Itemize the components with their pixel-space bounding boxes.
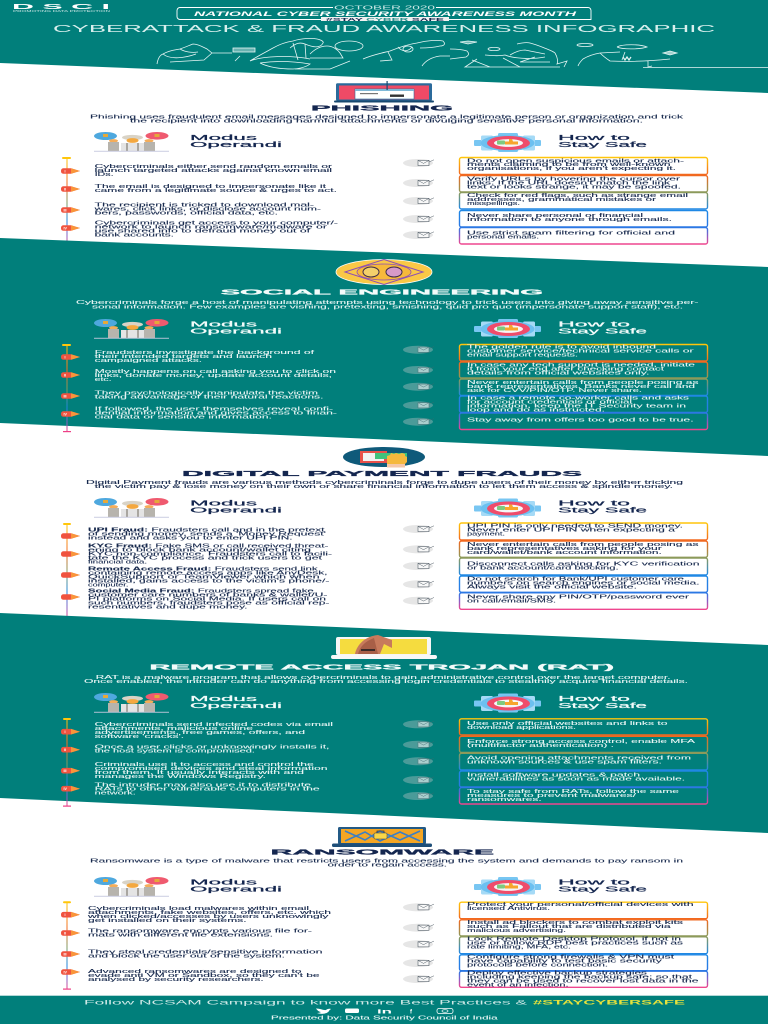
modus operandi steps: Once a user clicks or unknowingly installs it, [95,744,330,750]
timeline: IV [64,787,67,791]
how to stay safe label [558,499,647,515]
hashtag banner: #STAY CYBER SAFE [326,17,446,23]
modus operandi steps: installed, gains access to the victim's phone/- [88,578,330,584]
intro text [84,675,689,685]
safety tips: Use only official websites and links to [467,721,668,727]
safety tips: information, keep the IT Security team in [467,404,686,410]
modus operandi steps: Cybercriminals either send random emails or [95,164,332,170]
icon: stay safe gear [474,498,541,518]
safety tip boxes [460,719,708,804]
safety tips: such as Fallout that are distributed via [467,924,673,930]
safety tips: Verify URLs by hovering the cursor over [467,176,680,182]
safety tips: on call/email/SMS. [467,599,557,605]
intro text: Phishing uses fraudulent email messages designed to impersonate a legitimate person or organization and trick [90,114,683,120]
timeline: I [64,169,66,173]
modus operandi steps [88,527,332,611]
how to stay safe label: How to [558,499,630,508]
modus operandi steps: QuickSupport or TeamViewer which when [88,574,320,580]
safety tips: card/wallet/bank account information. [467,550,663,556]
section: digital payment frauds [61,447,708,619]
heading: SOCIAL ENGINEERING [221,288,543,297]
safety tips: ments claiming to be from well-known [467,162,671,168]
timeline [61,901,80,990]
modus operandi steps: The email is designed to impersonate like it [95,184,327,190]
section: social engineering [0,238,768,456]
modus operandi label [190,133,283,149]
timeline: IV [64,970,67,974]
modus operandi steps: ening to block bank account/wallet citing [88,548,311,554]
header banner [0,0,768,93]
modus operandi label: Modus [190,694,258,703]
modus operandi steps: IDs. [95,172,114,178]
timeline: IV [64,226,67,230]
intro text: Cybercriminals forge a host of manipulating attempts using technology to trick users into giving away sensitive per- [76,300,699,306]
safety tips: ransomwares. [467,797,543,803]
social icons: f [410,1010,413,1016]
modus operandi steps: network to launch ransomware/malware or [95,225,327,231]
modus operandi steps: Fraudsters investigate the background of [95,350,315,356]
intro text: Once enabled, the intruder can do anything from accessing login credentials to stealthily acquire financial details. [84,679,689,685]
modus operandi steps: cial data or sensitive information. [95,415,273,421]
presented by: Presented by: Data Security Council of India [271,1015,498,1021]
modus operandi steps: when clicked/accesses by users unknowingly [86,914,329,920]
safety tips: organisations, if you aren't expecting it. [467,166,677,172]
modus operandi steps: their intended targets and launch [95,354,272,360]
social icons [316,1008,453,1016]
safety tips [467,345,699,424]
timeline [61,157,80,246]
modus operandi steps: attachments, fake websites, offers, etc. which [88,910,331,916]
modus operandi steps: of sending money, sends a 'Money Request' [88,531,326,537]
safety tips: payment. [467,532,506,538]
safety tips: links. If the URL doesn't match the link [467,180,670,186]
icon: stay safe gear [474,877,541,896]
modus operandi steps: tate the KYC process and trick users to get [88,556,323,562]
timeline: II [64,187,66,191]
how to stay safe label: Stay Safe [558,327,647,336]
modus operandi steps: PI platforms on Social Media. If users call on [88,597,326,603]
modus operandi steps: etc. [95,377,112,383]
modus operandi steps: customer care numbers of banks & wallet/U- [88,593,328,599]
icon: stay safe gear [474,319,541,338]
safety tips: licensed Antivirus. [467,906,551,912]
modus operandi steps [92,164,338,239]
safety tips: text or looks strange, it may be spoofed. [467,184,682,190]
hashtag: #STAYCYBERSAFE [533,1000,687,1007]
modus operandi label [190,499,283,515]
safety tips: Lock Remote Desktop Protocol, if not in [467,937,681,943]
modus operandi steps: The ransomware encrypts various file for- [88,928,312,934]
safety tips: event of an infection. [467,982,569,988]
safety tips: download applications. [467,725,577,731]
section: remote access trojan [0,613,768,833]
how to stay safe label: Stay Safe [558,140,647,149]
hashtag banner [321,17,449,23]
modus operandi steps: Mostly happens on call asking you to click on [95,369,336,375]
safety tips [467,902,698,988]
safety tips: Never share any PIN/OTP/password ever [467,595,689,601]
timeline: III [64,208,66,212]
icon: modus operandi [94,319,169,339]
safety tip boxes [460,902,708,987]
safety tips: bank representatives asking for your [467,546,662,552]
modus operandi steps: resentatives and dupe money. [88,605,248,611]
timeline: IV [64,412,67,416]
intro text [90,114,683,124]
safety tips: Install ad blockers to combat exploit kits [467,920,683,926]
safety tips [467,524,700,605]
how to stay safe label: Stay Safe [558,506,647,515]
line art illustration of people [157,38,768,69]
section: ransomware [61,827,708,990]
intro text [76,300,699,310]
modus operandi steps: use shared info to defraud money out of [95,229,311,235]
modus operandi steps: The intruder may also use it to distribute [95,783,311,789]
safety tips: or bank account/card blocking. [467,565,619,571]
modus operandi steps: RATs to other vulnerable computers in the [95,787,320,793]
modus operandi steps: software 'cracks'. [95,734,185,740]
check icons [403,720,434,800]
safety tip boxes [460,158,708,244]
timeline [61,344,80,432]
intro text: Ransomware is a type of malware that restricts users from accessing the system and demands to pay ransom in [90,859,683,865]
safety tips: Never entertain calls from people posing as [467,542,699,548]
safety tips: Do not search for Bank/UPI customer care [467,577,684,583]
modus operandi steps [95,722,333,797]
campaign frame [177,5,591,20]
modus operandi steps: advertisements, free games, offers, and [95,730,305,736]
modus operandi label [190,320,283,336]
safety tips [467,158,688,240]
safety tips: The golden rule is to avoid inbound [467,345,656,351]
timeline: II [64,931,66,935]
safety tips: use or follow RDP best practices such as [467,941,683,947]
icon: phishing laptop [334,81,434,102]
icon: stay safe gear [474,694,541,712]
modus operandi steps: Advanced ransomwares are designed to [88,969,302,975]
modus operandi steps: Remote Access Fraud: Fraudsters send link [88,566,318,572]
modus operandi label: Modus [190,133,258,142]
modus operandi steps: Social Media Fraud: Fraudsters spread fake [88,589,314,595]
how to stay safe label [558,320,647,336]
modus operandi label: Modus [190,877,258,886]
modus operandi steps: mats with different file extensions. [88,932,274,938]
modus operandi steps: The recipient is tricked to download mal- [95,203,314,209]
safety tips: bank representatives. Banks never call and [467,384,695,390]
modus operandi steps: financial data. [88,560,148,566]
safety tips: personal emails. [467,234,540,240]
how to stay safe label [558,133,647,149]
modus operandi steps: came from a legitimate source & urges to act. [95,188,338,194]
modus operandi steps: attachments, malicious online [95,726,253,732]
safety tips: Install software updates & patch [467,773,640,779]
safety tips: In case a remote co-worker calls and asks [467,396,689,402]
modus operandi steps: get installed on their systems. [88,918,248,924]
timeline [61,718,80,807]
how to stay safe label [558,877,647,893]
safety tips: vulnerabilities as soon as made available. [467,777,686,783]
modus operandi steps: and block the user out of the system. [88,953,286,959]
how to stay safe label: Stay Safe [558,884,647,893]
modus operandi label: Operandi [190,701,283,710]
modus operandi steps: taking advantage of their natural reactions. [95,395,324,401]
main title: CYBERATTACK & FRAUD AWARENESS INFOGRAPHIC [53,24,715,35]
timeline: I [64,730,66,734]
modus operandi steps: wares, click links, or disclose account num- [92,207,321,213]
timeline: II [64,748,66,752]
safety tips: Avoid opening attachments received from [467,756,692,762]
modus operandi steps: such numbers, fraudsters pose as official rep- [88,601,330,607]
social icons: in [377,1010,393,1016]
how to stay safe label: How to [558,320,630,329]
modus operandi steps: They psychologically manipulate the victim [95,391,319,397]
safety tips: Stay away from offers too good to be true. [467,418,695,424]
follow line: Follow NCSAM Campaign to know more Best Practices & [84,1000,529,1007]
modus operandi steps: compromised devices and steal information [95,766,327,772]
modus operandi steps: evade anti VM or Sandbox, so they can't be [88,973,320,979]
safety tips: Check for red flags, such as strange email [467,193,688,199]
safety tips: information to anyone through emails. [467,217,673,223]
modus operandi label [190,694,283,710]
modus operandi steps: manages the Windows Registry. [95,774,267,780]
safety tips: malicious advertising. [467,928,567,934]
safety tips: misspellings. [467,201,521,207]
icon: trojan horse laptop [331,635,437,659]
safety tips: for account credentials or official [467,400,632,406]
safety tips: Disconnect calls asking for KYC verification [467,561,700,567]
timeline: III [64,394,66,398]
safety tips: Enforce strong access control, enable MFA [467,739,696,745]
safety tips: Never entertain calls from people posing as [467,380,699,386]
safety tips: To stay safe from RATs, follow the same [467,789,679,795]
modus operandi steps: Cybercriminals load malwares within email [88,906,309,912]
safety tips: have capability to test basic security [467,958,662,964]
modus operandi steps: Cybercriminals get access to your computer/- [95,221,338,227]
icon: social engineering badge [336,260,432,284]
check icons [403,346,434,426]
how to stay safe label: How to [558,133,630,142]
safety tips: details from official websites only. [467,370,650,376]
intro text: the recipient into downloading harmful attachments or divulging sensitive personal information. [130,118,644,124]
modus operandi label: Modus [190,320,258,329]
safety tips: email support requests. [467,353,579,359]
safety tips [467,721,696,803]
safety tip boxes [460,523,708,609]
modus operandi steps: If followed, the user themselves reveal confi- [95,407,333,413]
heading: REMOTE ACCESS TROJAN (RAT) [150,662,616,671]
icon: digital payment [343,447,425,468]
DSCI logo: D S C I [12,2,110,11]
safety tips: Configure strong firewalls & VPN must [467,954,675,960]
timeline: III [64,952,66,956]
check icons [403,525,434,605]
safety tips: loop and do as instructed. [467,408,606,414]
safety tip boxes [460,344,708,430]
timeline: I [64,913,66,917]
modus operandi steps: computer. [88,582,129,588]
heading: DIGITAL PAYMENT FRAUDS [182,469,582,478]
icon: modus operandi [94,498,169,518]
safety tips: Never enter UPI PIN when expecting a [467,528,677,534]
safety tips: UPI PIN is only needed to SEND money. [467,524,684,530]
modus operandi steps: network. [95,791,137,797]
DSCI logo [12,2,110,13]
modus operandi steps [95,350,337,421]
safety tips: Use strict spam filtering for official and [467,230,675,236]
icon: modus operandi [94,877,169,897]
timeline: III [64,769,66,773]
safety tips: including keeping the backup safe; so that [467,974,693,980]
safety tips: Never share personal or financial [467,213,643,219]
modus operandi steps [86,906,331,983]
modus operandi steps: links, donate money, update account details, [95,373,333,379]
safety tips: unknown sources & use spam filters. [467,760,663,766]
timeline [61,523,80,619]
safety tips: addresses, grammatical mistakes or [467,197,656,203]
safety tips: In case any tech support is needed, initiate [467,362,695,368]
modus operandi steps: campaigned attacks. [95,358,203,364]
footer [0,996,768,1024]
safety tips: numbers on search engines or social media. [467,581,700,587]
modus operandi steps: the host system is compromised. [95,748,256,754]
timeline: II [64,373,66,377]
timeline: I [64,355,66,359]
modus operandi steps: UPI Fraud: Fraudsters call and in the pretext [88,527,325,533]
safety tips: Always visit the official website. [467,585,638,591]
icon: modus operandi [94,693,169,713]
icon: modus operandi [94,132,169,152]
modus operandi steps: instead and asks you to enter UPI PIN. [88,535,294,541]
intro text: sonal information. Few examples are vishing, pretexting, smishing, quid pro quo (impersonate support staff), etc. [92,304,684,310]
modus operandi label: Operandi [190,884,283,893]
safety tips: ask for CVV/PIN/OTP. Never share. [467,388,643,394]
safety tips: measures to prevent malwares/ [467,793,637,799]
modus operandi steps: bers, passwords, official data, etc. [95,211,279,217]
heading: RANSOMWARE [271,848,494,857]
modus operandi steps: containing remote access apps like AnyDesk, [88,570,328,576]
safety tips: it from your end after checking contact [467,366,665,372]
safety tips: customer service/technical service calls or [467,349,694,355]
intro text: the victim pay & lose money on their own or share financial information to let them access & spindle money. [95,484,674,490]
intro text: RAT is a malware program that allows cybercriminals to gain administrative control over the target computer. [96,675,672,681]
icon: stay safe gear [474,133,541,152]
modus operandi steps: launch targeted attacks against known email [95,168,332,174]
modus operandi label [190,877,283,893]
icon: ransomware laptop [332,827,432,847]
modus operandi steps: bank accounts. [95,233,175,239]
safety tips: (multifactor authentication) . [467,743,615,749]
how to stay safe label: How to [558,694,630,703]
section: phishing [61,81,708,246]
DSCI logo: PROMOTING DATA PROTECTION [13,9,110,13]
intro text: Digital Payment frauds are various methods cybercriminals forge to dupe users of their money by either tricking [86,480,683,486]
safety tips: rate limiting, MFA, etc. [467,945,572,951]
heading: PHISHING [311,103,453,112]
modus operandi steps: Criminals use it to access and control the [95,762,314,768]
how to stay safe label: How to [558,877,630,886]
safety tips: Do not open suspicious emails or attach- [467,158,684,164]
modus operandi label: Operandi [190,506,283,515]
date: OCTOBER 2020 [334,5,435,11]
intro text: order to regain access. [328,862,448,868]
safety tips: Protect your personal/official devices with [467,902,694,908]
modus operandi steps: dential information and gives access to finan- [95,411,337,417]
modus operandi label: Operandi [190,327,283,336]
how to stay safe label [558,694,647,710]
safety tips: they can be used to recover lost data in the [467,978,698,984]
modus operandi steps: analysed by security researchers. [88,977,265,983]
modus operandi steps: KYC non-compliance. Fraudsters call to facili- [88,552,332,558]
modus operandi label: Operandi [190,140,283,149]
safety tips: Deploy effective backup strategies [467,970,647,976]
campaign title: NATIONAL CYBER SECURITY AWARENESS MONTH [194,11,577,18]
modus operandi label: Modus [190,499,258,508]
intro text [90,859,683,868]
modus operandi steps: from them. It usually interacts with and [95,770,304,776]
check icons [403,159,434,239]
how to stay safe label: Stay Safe [558,701,647,710]
safety tips: protocols before connection. [467,962,609,968]
intro text [86,480,683,490]
modus operandi steps: They steal credentials/sensitive information [88,949,322,955]
check icons [403,903,434,983]
modus operandi steps: Cybercriminals send infected codes via email [95,722,333,728]
modus operandi steps: KYC Fraud: Fake SMS or call received threat- [88,544,329,550]
